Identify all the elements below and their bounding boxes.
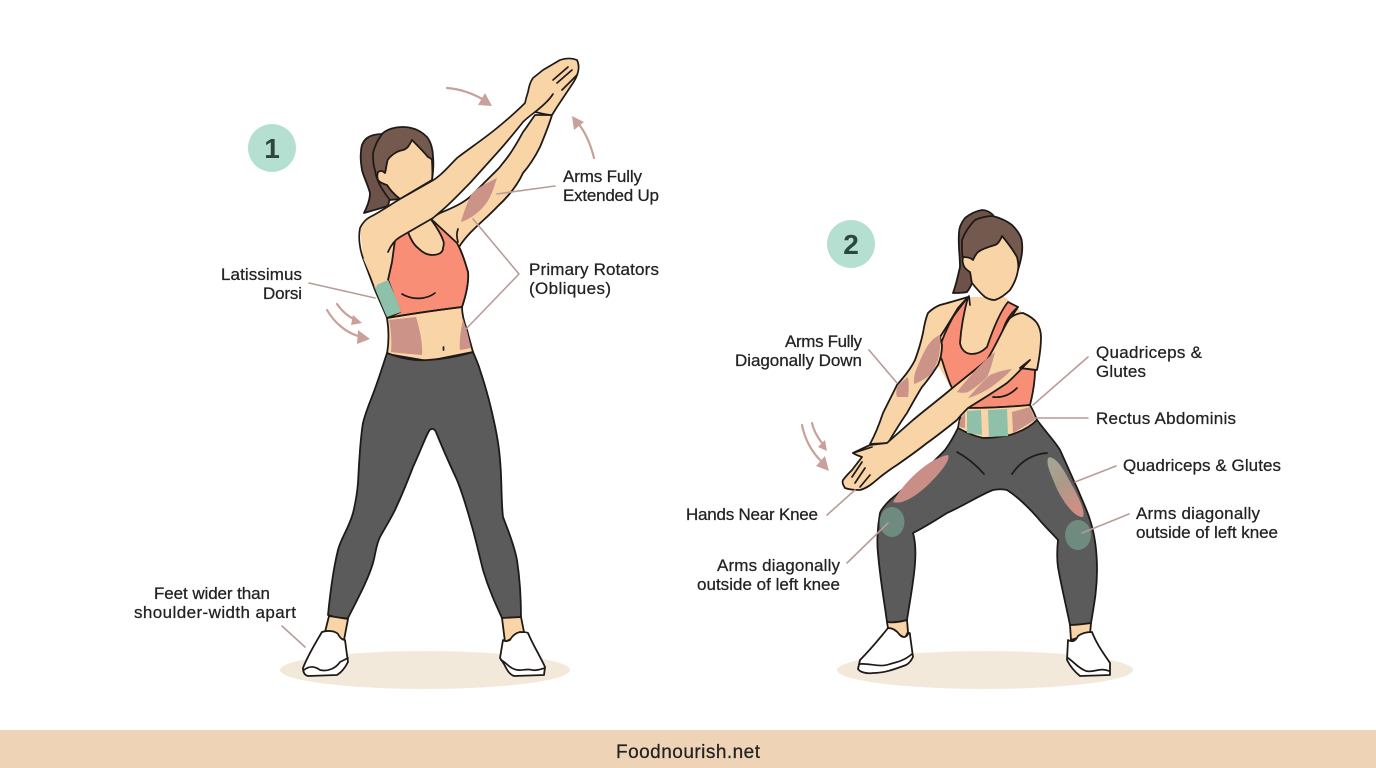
right shoe [500,632,545,676]
oblique muscle right [460,319,471,350]
motion arrow: waist inner [337,304,362,325]
label: quadriceps and glutes upper: Glutes [1096,362,1146,381]
label: feet wider: Feet wider than [154,584,270,603]
footer band: Foodnourish.net [616,742,761,763]
label: primary rotators: Primary Rotators [529,260,659,279]
label: hands near knee: Hands Near Knee [686,505,818,524]
label: arms diagonally left: outside of left knee [697,575,840,594]
figure 2: squat with diagonal arms [843,210,1110,676]
label: arms fully diagonally down: Diagonally Down [735,351,862,370]
label: latissimus dorsi: Dorsi [263,284,302,303]
belly button [442,347,444,350]
right arm muscles [957,352,1012,398]
leader: feet wider [282,626,305,647]
right shoe sole: squat [1068,658,1109,671]
left shoe: squat [858,628,913,673]
leader: hands near knee [827,490,855,515]
right shoe sole [501,660,545,670]
rectus abdominis panel centre [988,409,1008,437]
strap edge [1003,307,1018,330]
leader: latissimus dorsi [309,283,375,298]
label: arms diagonally left: Arms diagonally [717,556,840,575]
label: feet wider: shoulder-width apart [134,603,296,622]
left arm muscles [896,335,940,397]
label: arms fully diagonally down: Arms Fully [785,332,862,351]
leggings: squat [877,420,1097,625]
rectus abdominis panel left [967,410,982,435]
hair: figure 2 [962,216,1022,272]
sports bra: squat [940,297,1035,408]
front arm and hand [359,58,579,288]
step badge 1 [248,124,296,172]
thigh muscle left [893,455,949,503]
hand finger lines [535,67,577,112]
label: quadriceps and glutes: Quadriceps & Glutes [1123,456,1281,475]
knee muscle right [1065,520,1091,550]
leader: arms diagonally down [869,350,897,383]
upper arm muscle [461,178,497,222]
motion arrow: top [447,88,492,106]
motion arrow: squat outer [802,425,829,471]
left shoe sole: squat [860,654,912,666]
left arm [870,297,968,444]
leader: quadriceps and glutes [1075,466,1116,482]
step badge 1: 1 [264,133,280,164]
leader: knee right [1082,514,1129,533]
step badge 2: 2 [843,229,859,260]
label: quadriceps and glutes upper: Quadriceps & [1096,343,1203,362]
abdomen band [958,405,1037,438]
ponytail: figure 2 [953,210,993,293]
torso and rear arm [363,115,552,361]
face: squat [963,236,1018,300]
leader: rectus abdominis [1033,417,1088,419]
left shoe sole [304,658,348,671]
underarm crease [457,229,458,242]
knee muscle left [880,507,904,537]
label: latissimus dorsi: Latissimus [221,265,302,284]
motion arrow: squat inner [812,423,827,451]
ankles [325,616,524,642]
ground shadow: figure 2 [837,651,1133,689]
right shoe: squat [1067,632,1110,676]
right arm and hand [843,313,1041,490]
torso: squat [938,297,1041,408]
face [377,140,432,199]
leader: knee left [847,523,888,563]
bra under-bust line [402,293,435,298]
oblique panel left [959,413,965,428]
label: arms diagonally right: outside of left knee [1136,523,1278,542]
label: rectus abdominis: Rectus Abdominis [1096,409,1236,428]
leader: arms fully extended up [497,186,555,194]
leggings [328,352,521,619]
figure 1: standing with arms raised [303,58,579,676]
label: primary rotators: (Obliques) [529,279,611,298]
label: arms fully extended up: Extended Up [563,186,659,205]
left ankle [887,620,908,638]
ground shadow: figure 1 [280,651,570,689]
hair: figure 1 [373,127,433,200]
label: arms diagonally right: Arms diagonally [1136,504,1260,523]
motion arrow: right [572,116,594,158]
bra band line [387,307,462,318]
hand finger lines: squat [852,447,872,487]
oblique muscle left [389,317,422,355]
ponytail: figure 1 [361,134,392,213]
leader: primary rotators [466,219,519,329]
oblique panel right [1012,407,1035,433]
left shoe [303,631,348,676]
neck crease [969,296,970,305]
footer band [0,730,1376,768]
step badge 2 [827,220,875,268]
label: arms fully extended up: Arms Fully [563,167,642,186]
sports bra [387,218,468,318]
thigh muscle right [1047,457,1084,517]
bra under-bust line: squat [993,388,1017,397]
hip creases [957,452,1047,474]
leader: quadriceps and glutes upper [1033,357,1088,405]
right ankle [1070,623,1091,640]
leader lines [282,186,1129,647]
latissimus panel [374,280,401,317]
motion arrow: waist outer [327,310,370,344]
